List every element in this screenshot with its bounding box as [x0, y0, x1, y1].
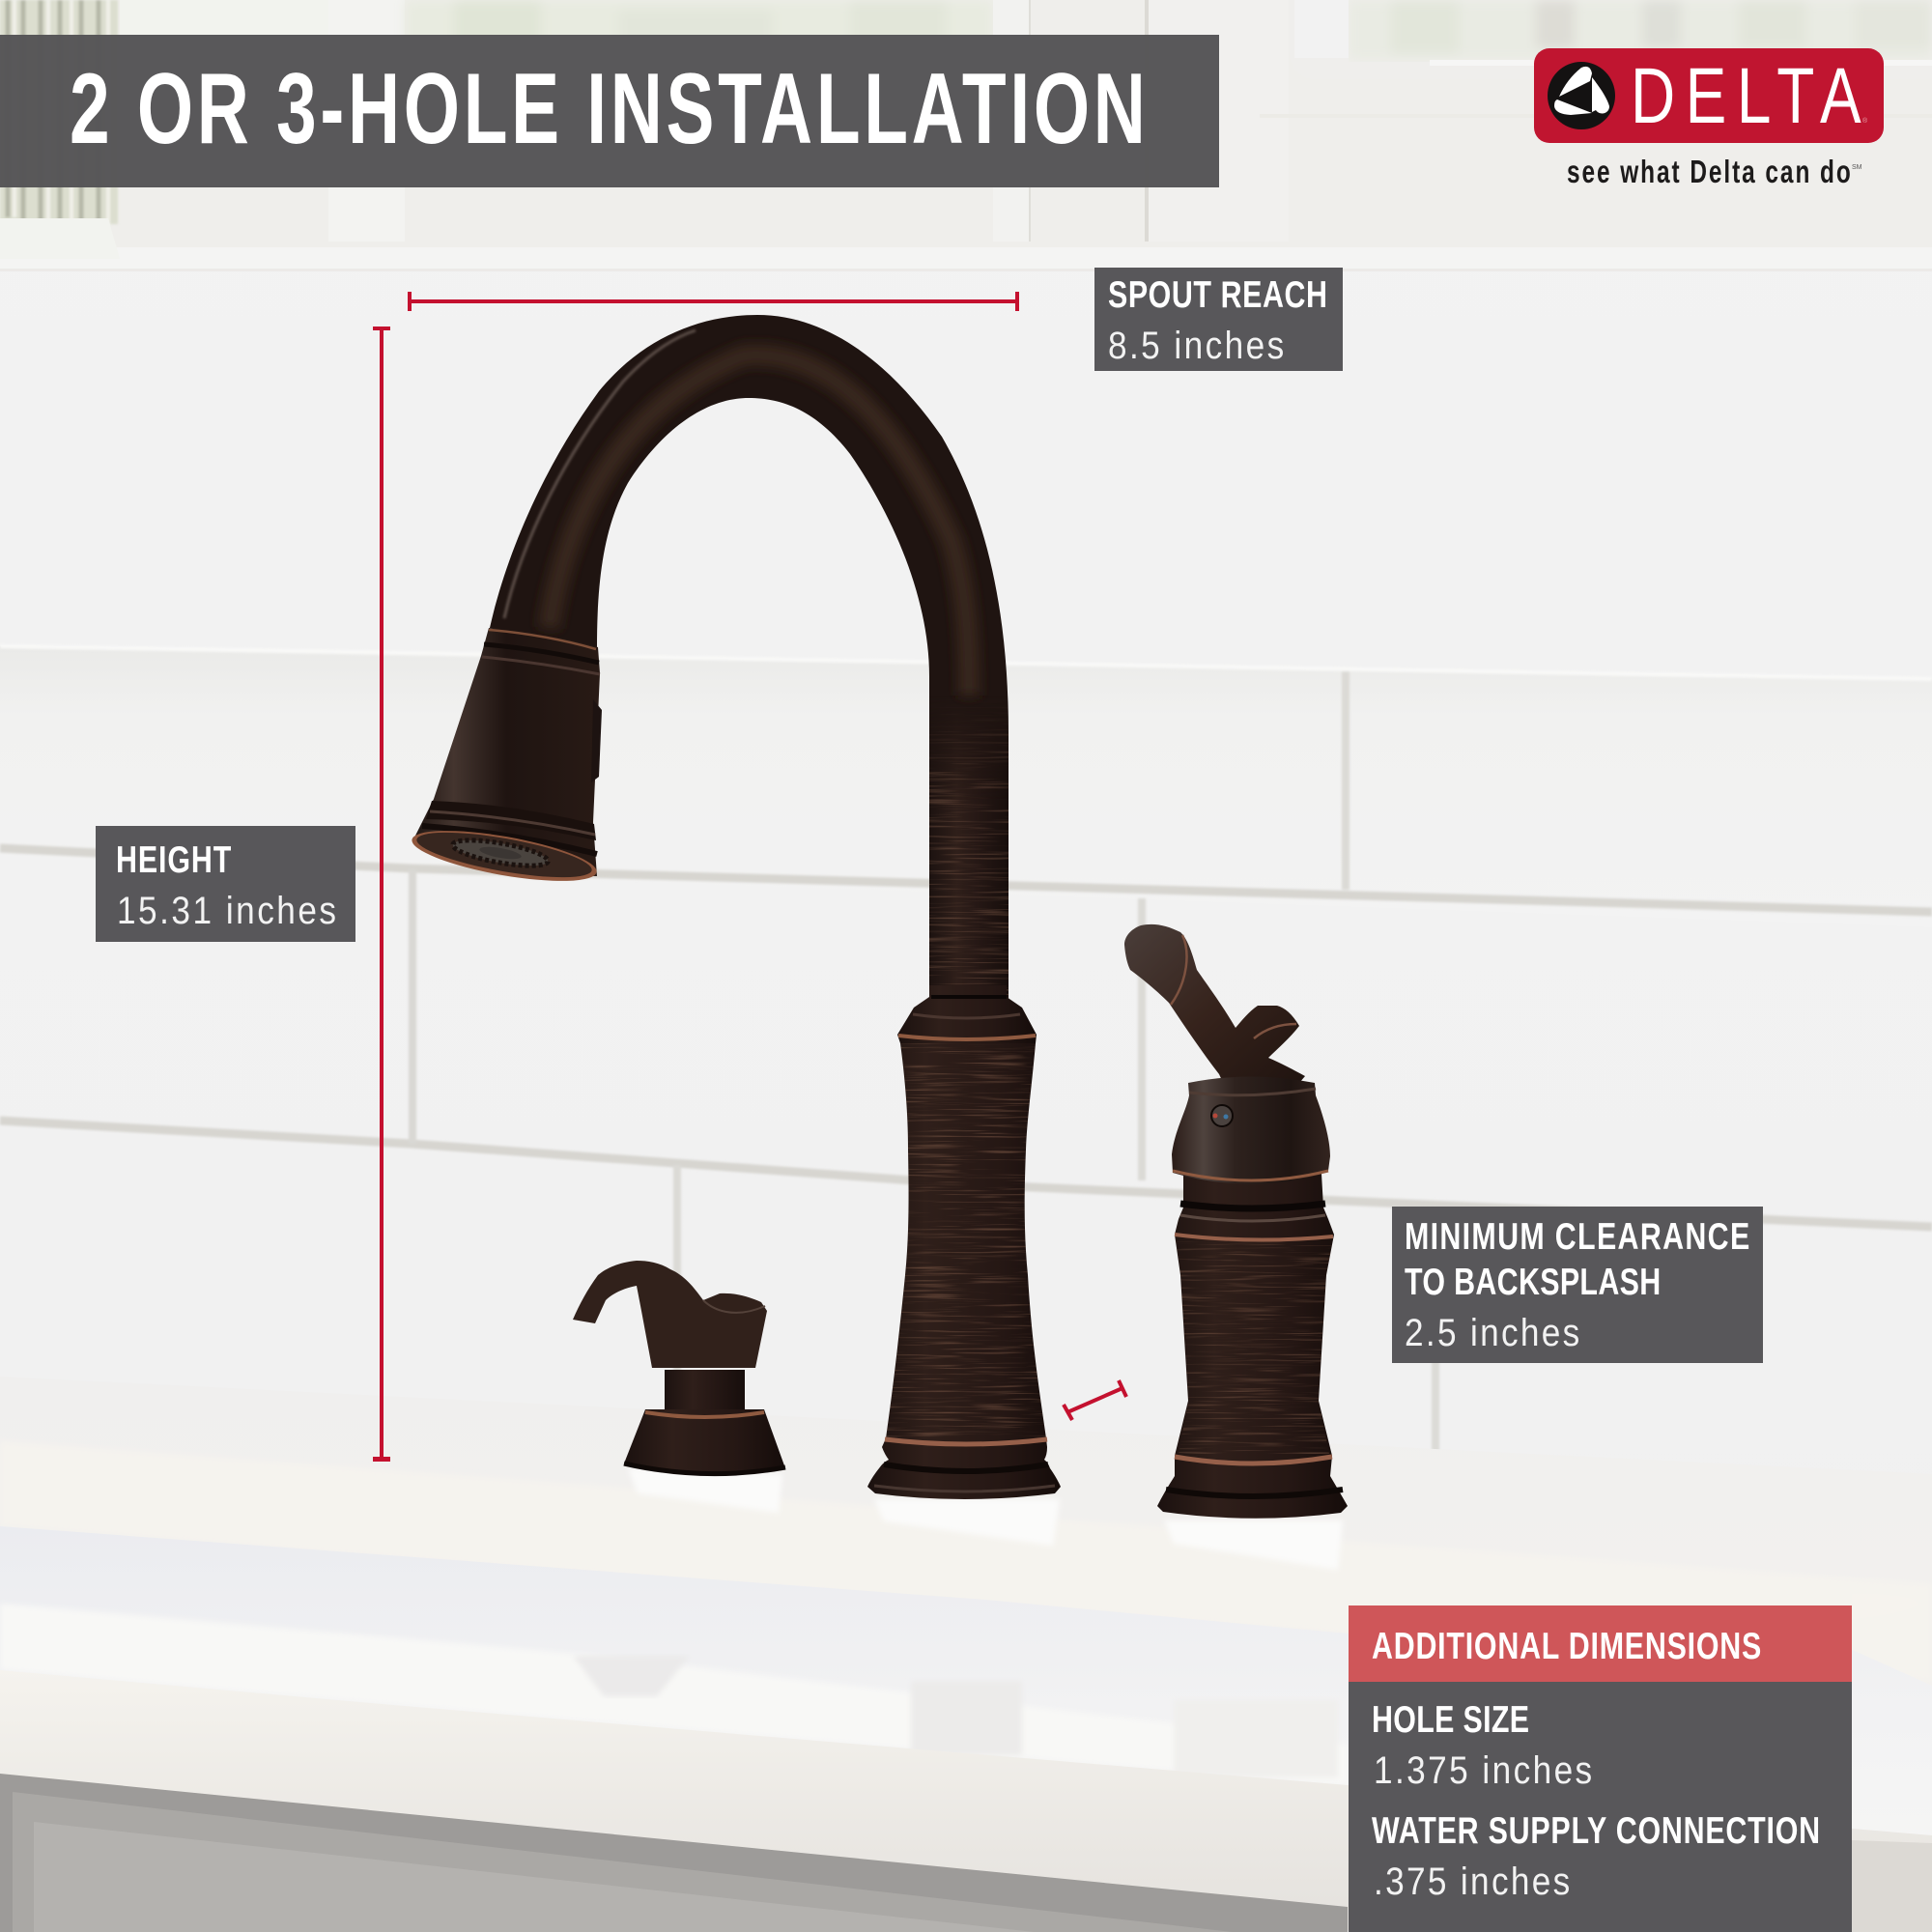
title bar [0, 35, 1219, 187]
panel: additional dimensions: HOLE SIZE [1372, 1698, 1529, 1741]
logo: tagline: SM [1852, 164, 1862, 171]
dimension line: spout reach [408, 292, 1019, 311]
soap dispenser [573, 1261, 785, 1474]
panel: additional dimensions: ADDITIONAL DIMENSIONS [1372, 1625, 1761, 1667]
label: height: 15.31 inches [117, 889, 336, 931]
label: minimum clearance: MINIMUM CLEARANCE [1405, 1215, 1749, 1258]
faucet: pull-down spray head [409, 628, 602, 892]
panel: additional dimensions: WATER SUPPLY CONNECTION [1372, 1809, 1820, 1852]
faucet: tube brushed copper streaks [929, 696, 1009, 997]
handle: body [1157, 1076, 1348, 1519]
logo: Delta badge: DELTA [1631, 50, 1861, 140]
reflection: highlights under fixtures [628, 1468, 1343, 1570]
label: minimum clearance [1392, 1207, 1763, 1363]
dimension line: height [373, 327, 390, 1462]
decoration: plant in glass vase [0, 0, 120, 259]
panel: additional dimensions: 1.375 inches [1374, 1748, 1592, 1791]
dimension line: minimum clearance [1064, 1380, 1126, 1420]
faucet: spout arc [490, 315, 1009, 1005]
panel: additional dimensions: .375 inches [1374, 1860, 1570, 1902]
handle: lever [1124, 924, 1305, 1087]
title bar: 2 OR 3-HOLE INSTALLATION [70, 53, 1146, 165]
faucet: base column [867, 985, 1061, 1499]
background: right side counter shade [1852, 1840, 1932, 1932]
label: minimum clearance: 2.5 inches [1405, 1311, 1579, 1353]
label: spout reach [1094, 268, 1343, 371]
panel: additional dimensions [1349, 1605, 1852, 1932]
label: height [96, 826, 355, 942]
background: wall tiles and grout [0, 646, 1932, 1536]
background: countertop [0, 1377, 1932, 1835]
label: spout reach: 8.5 inches [1108, 324, 1284, 366]
label: height: HEIGHT [116, 838, 231, 881]
logo: tagline: see what Delta can do [1567, 156, 1851, 190]
background: grey cabinet [0, 1774, 1348, 1932]
logo: Delta badge: ® [1862, 117, 1868, 125]
logo: Delta badge [1534, 48, 1884, 143]
background: counter front edge [0, 1670, 1932, 1932]
label: minimum clearance: TO BACKSPLASH [1405, 1261, 1661, 1303]
background: sink basin [0, 1526, 1932, 1864]
label: spout reach: SPOUT REACH [1108, 273, 1327, 316]
background: window and sill [0, 0, 1932, 271]
